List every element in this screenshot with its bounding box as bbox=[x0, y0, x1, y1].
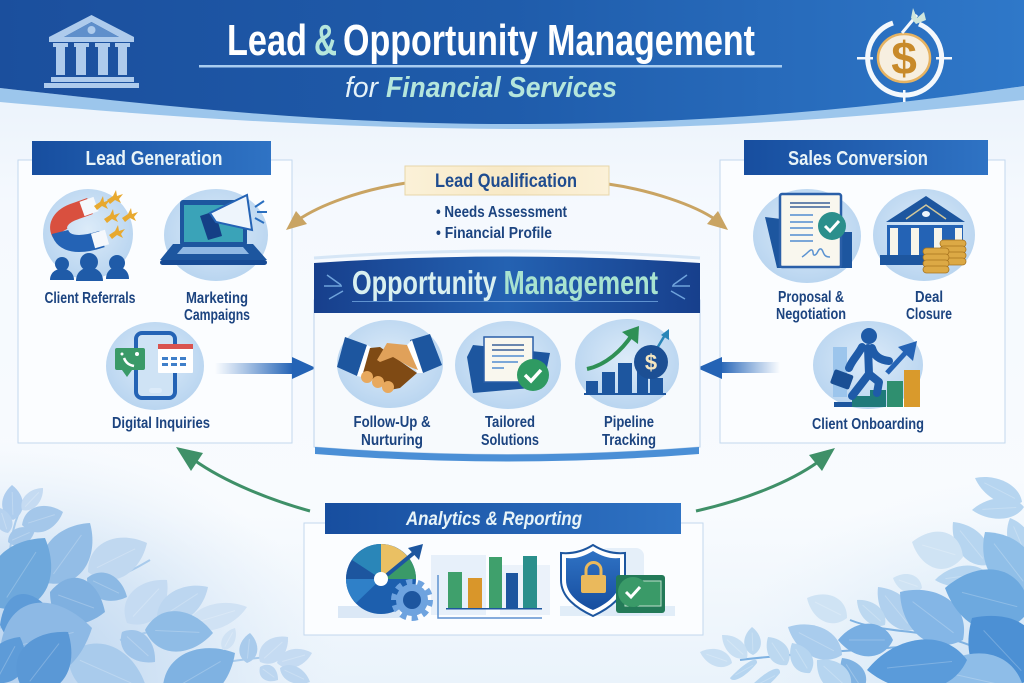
label: follow-up and nurturing: Follow-Up & bbox=[354, 414, 431, 431]
heading: lead qualification: Lead Qualification bbox=[435, 171, 577, 192]
label: digital inquiries: Digital Inquiries bbox=[112, 415, 210, 432]
label: deal closure: Deal bbox=[915, 289, 943, 306]
label: follow-up and nurturing: Nurturing bbox=[361, 432, 423, 449]
heading: opportunity management bbox=[314, 256, 700, 313]
heading: lead generation bbox=[32, 141, 271, 175]
icon: bank and coins bbox=[873, 189, 975, 281]
icon: handshake bbox=[337, 320, 443, 408]
arrow: lead generation to opportunity bbox=[215, 357, 316, 379]
heading: sales conversion bbox=[744, 140, 988, 175]
heading: lead qualification bbox=[405, 166, 609, 195]
subtitle: Financial Services bbox=[386, 72, 617, 104]
arrow: qualification to lead generation bbox=[286, 183, 406, 230]
arrow: qualification to sales conversion bbox=[608, 184, 728, 230]
title: Opportunity Management bbox=[343, 16, 755, 65]
heading: opportunity management: Opportunity Management bbox=[352, 264, 658, 301]
icon: pipeline growth chart: $ bbox=[645, 350, 657, 375]
icon: laptop and megaphone bbox=[160, 189, 268, 281]
chart: bars bbox=[438, 556, 542, 618]
icon: dollar target bbox=[857, 8, 952, 102]
icon: dollar target: $ bbox=[891, 32, 917, 84]
label: deal closure: Closure bbox=[906, 306, 952, 323]
qualification list bbox=[436, 204, 568, 242]
heading: analytics and reporting bbox=[325, 503, 681, 534]
icon: magnet and clients bbox=[43, 189, 138, 281]
icon: bank building in header bbox=[44, 15, 139, 88]
header banner bbox=[0, 0, 1024, 129]
label: pipeline tracking bbox=[602, 414, 656, 449]
qualification list: • Financial Profile bbox=[436, 225, 552, 242]
label: pipeline tracking: Tracking bbox=[602, 432, 656, 449]
panel: opportunity management bbox=[314, 251, 700, 462]
title divider bbox=[199, 65, 782, 68]
background glow: bottom right bbox=[720, 480, 1024, 683]
label: marketing campaigns bbox=[184, 290, 250, 324]
icon: shield with padlock and cash bbox=[561, 545, 665, 616]
label: pipeline tracking: Pipeline bbox=[604, 414, 654, 431]
arrow: analytics to sales conversion bbox=[696, 448, 835, 511]
label: marketing campaigns: Marketing bbox=[186, 290, 248, 307]
heading: sales conversion: Sales Conversion bbox=[788, 148, 928, 170]
icon: pie chart and gear bbox=[346, 544, 430, 618]
decorative leaves: bottom left bbox=[0, 483, 314, 683]
label: deal closure bbox=[906, 289, 952, 323]
label: client onboarding: Client Onboarding bbox=[812, 416, 924, 433]
icon: climbing figure onboarding bbox=[813, 321, 923, 409]
arrow: sales conversion to opportunity bbox=[697, 357, 780, 379]
icon: pipeline growth chart bbox=[575, 319, 679, 409]
background glow: bottom left bbox=[0, 440, 340, 683]
subtitle: for bbox=[345, 72, 379, 104]
label: proposal and negotiation: Negotiation bbox=[776, 306, 846, 323]
title: & bbox=[314, 16, 337, 65]
label: follow-up and nurturing bbox=[354, 414, 431, 449]
panel: lead generation bbox=[18, 141, 292, 443]
label: tailored solutions bbox=[481, 414, 539, 449]
icon: phone and calendar bbox=[106, 322, 204, 410]
heading: lead generation: Lead Generation bbox=[86, 148, 222, 170]
icon: tailored solutions document bbox=[455, 321, 561, 409]
label: proposal and negotiation: Proposal & bbox=[778, 289, 844, 306]
heading: analytics and reporting: Analytics & Reporting bbox=[405, 509, 582, 530]
label: tailored solutions: Solutions bbox=[481, 432, 539, 449]
decorative chart backdrop bbox=[338, 548, 675, 618]
icon: proposal document bbox=[753, 189, 861, 283]
arrow: analytics to lead generation bbox=[176, 447, 310, 511]
decorative leaves: bottom right bbox=[697, 469, 1024, 683]
label: marketing campaigns: Campaigns bbox=[184, 307, 250, 324]
label: tailored solutions: Tailored bbox=[485, 414, 535, 431]
label: client referrals: Client Referrals bbox=[44, 290, 136, 307]
title bbox=[227, 16, 755, 65]
panel: analytics and reporting bbox=[304, 503, 703, 635]
title: Lead bbox=[227, 16, 307, 65]
panel: sales conversion bbox=[720, 140, 1005, 443]
qualification list: • Needs Assessment bbox=[436, 204, 568, 221]
label: proposal and negotiation bbox=[776, 289, 846, 323]
